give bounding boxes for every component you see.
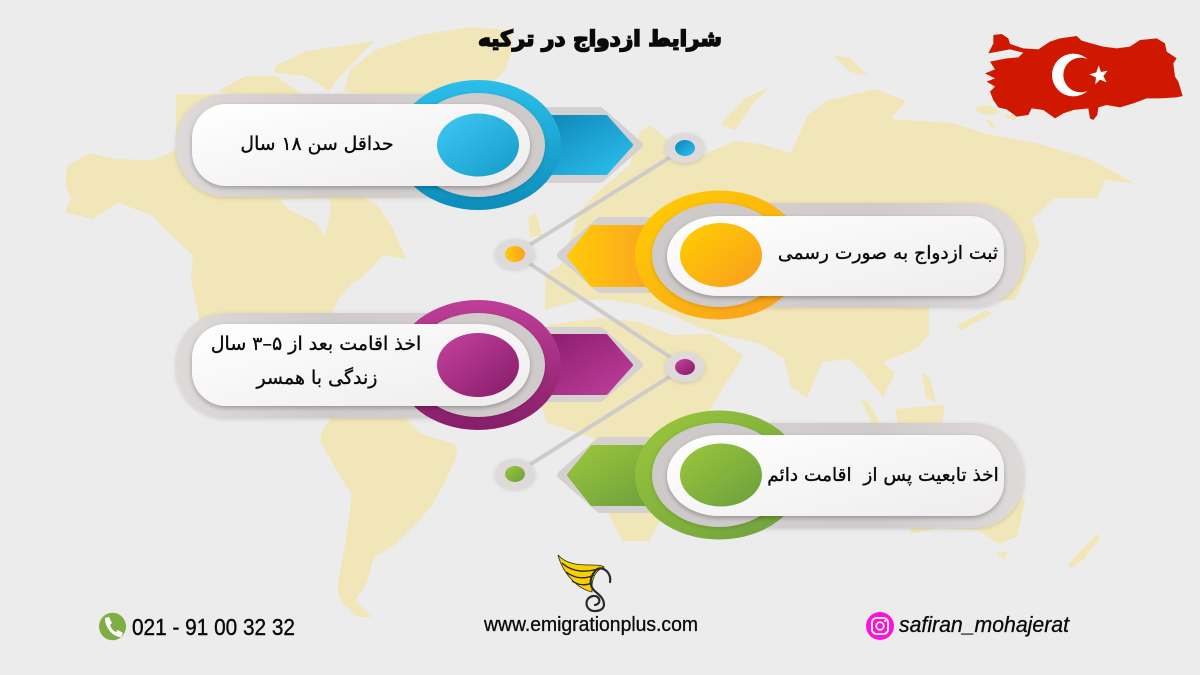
world map	[65, 27, 1136, 617]
panel: citizenship (green)	[561, 410, 1024, 540]
icon: Turkey map flag	[985, 34, 1183, 120]
arrow tab: blue	[540, 111, 639, 179]
circle: green	[680, 444, 762, 506]
arrow tab: green	[561, 441, 660, 509]
title: شرایط ازدواج در ترکیه	[478, 27, 722, 52]
connector lines	[515, 148, 685, 474]
phone number: 021 - 91 00 32 32	[132, 614, 295, 640]
node: green	[495, 459, 535, 489]
icon: logo	[558, 555, 610, 611]
icon: phone	[99, 613, 126, 640]
website: www.emigrationplus.com	[483, 614, 698, 636]
icon: instagram	[866, 612, 894, 640]
circle: purple	[437, 333, 519, 397]
panel: residence (purple)	[176, 300, 639, 430]
instagram handle: safiran_mohajerat	[899, 612, 1070, 637]
circle: yellow	[680, 223, 762, 287]
label: residence line two: زندگی با همسر	[256, 366, 377, 389]
panel: minimum age (blue)	[176, 80, 639, 210]
label: minimum age: حداقل سن ۱۸ سال	[240, 134, 394, 155]
label: citizenship: اخذ تابعیت پس از اقامت دائم	[767, 465, 999, 486]
circle: blue	[437, 114, 519, 176]
node: yellow	[495, 239, 535, 269]
panel: official registration (yellow)	[561, 190, 1024, 320]
node: purple	[665, 352, 705, 382]
node: blue	[665, 133, 705, 163]
label: residence: اخذ اقامت بعد از ۵–۳ سال	[211, 333, 421, 355]
arrow tab: yellow	[561, 221, 660, 289]
arrow tab: purple	[540, 331, 639, 398]
label: official registration: ثبت ازدواج به صورت رسمی	[778, 243, 998, 264]
